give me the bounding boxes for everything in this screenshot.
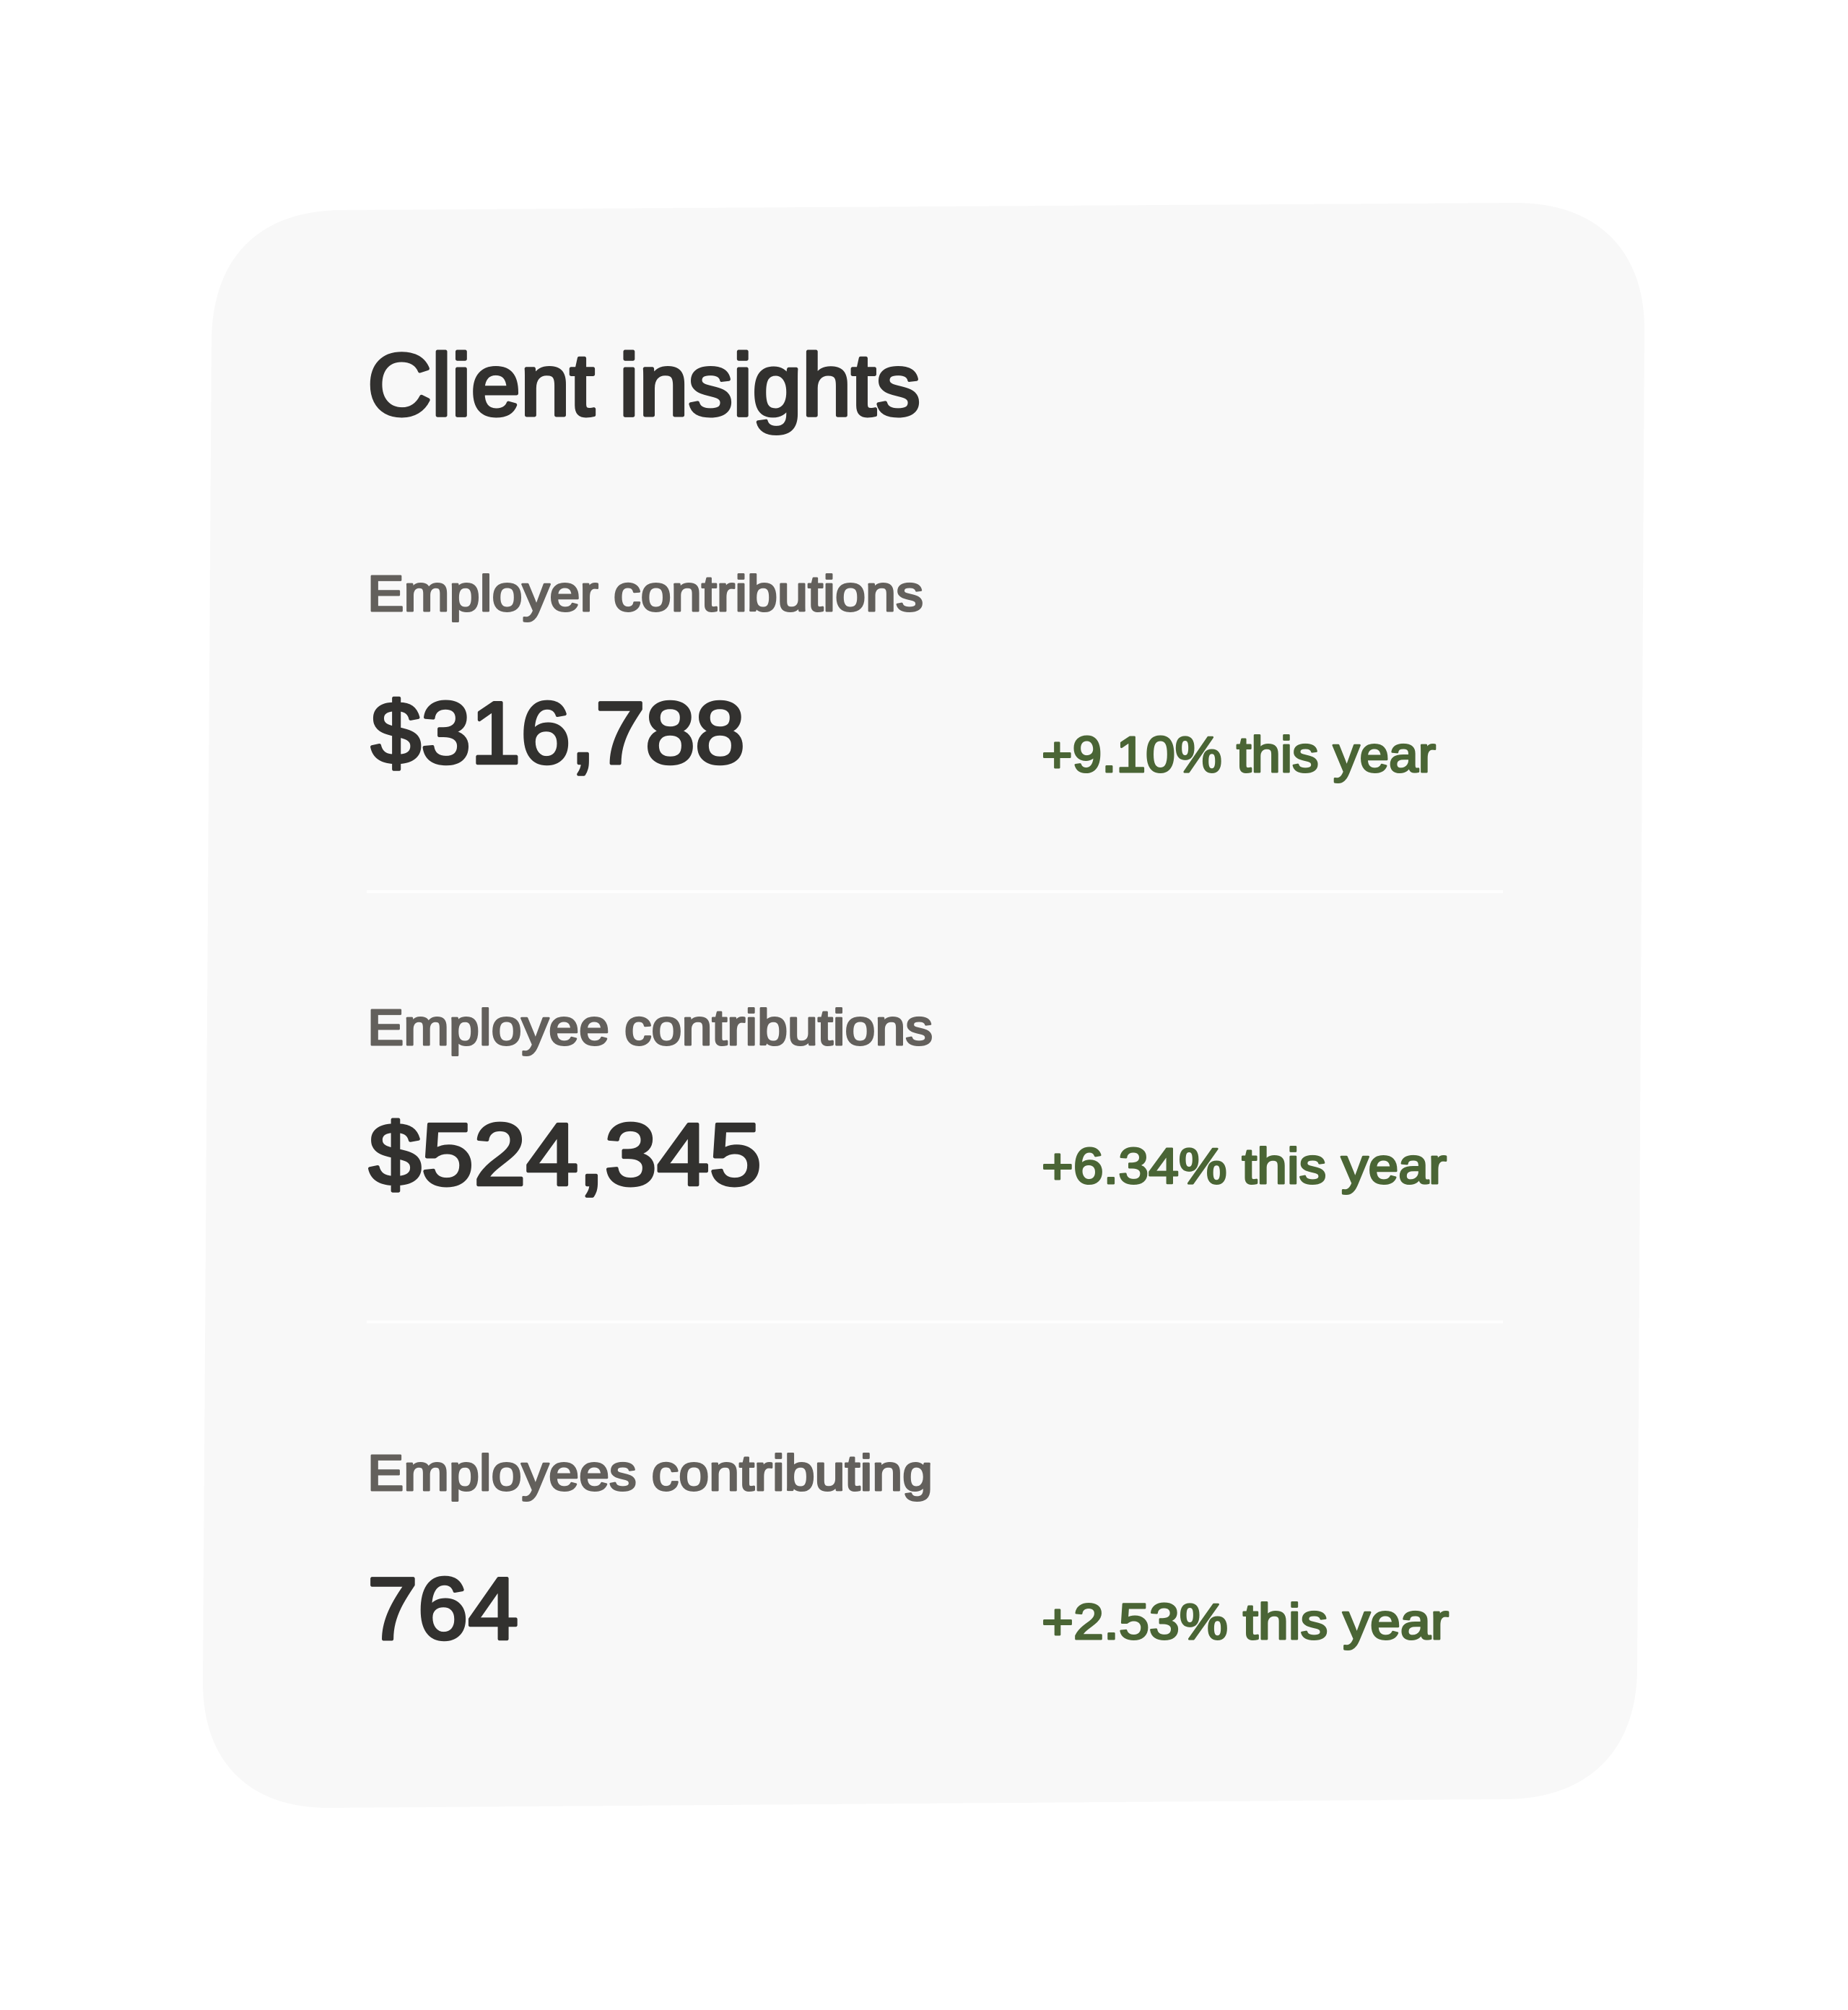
metric: employees contributing bbox=[367, 1445, 1449, 1658]
value: $524,345 bbox=[369, 1105, 762, 1204]
label: Employee contributions bbox=[367, 999, 933, 1056]
value: $316,788 bbox=[371, 684, 745, 782]
label: Employees contributing bbox=[367, 1445, 933, 1501]
change: +9.10% this year bbox=[1042, 726, 1436, 783]
change: +2.53% this year bbox=[1042, 1593, 1449, 1650]
metric: employer contributions bbox=[367, 565, 1436, 783]
value: 764 bbox=[367, 1559, 518, 1658]
panel: client insights card bbox=[203, 203, 1644, 1808]
title: Client insights bbox=[367, 336, 920, 434]
change: +6.34% this year bbox=[1042, 1138, 1447, 1194]
metric: employee contributions bbox=[367, 999, 1447, 1204]
label: Employer contributions bbox=[367, 565, 923, 622]
